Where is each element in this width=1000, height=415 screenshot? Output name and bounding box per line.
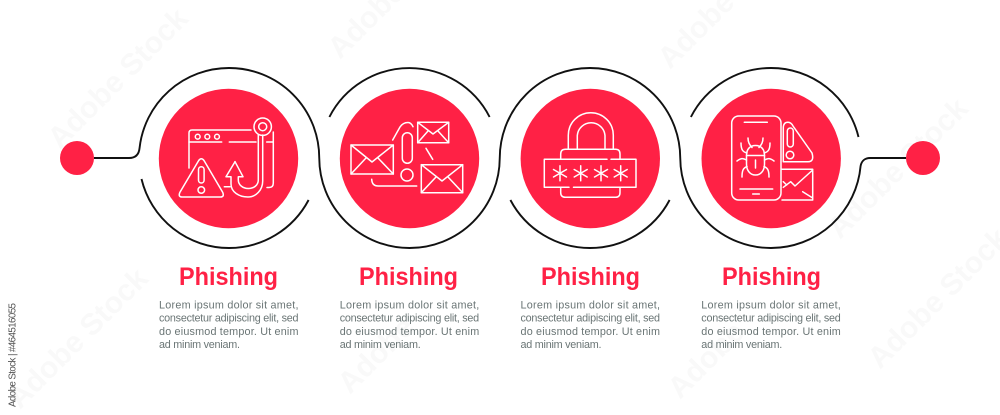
step 2 heading: Phishing: [359, 263, 458, 291]
connector line: [94, 68, 906, 248]
step 2 body text: Lorem ipsum dolor sit amet,: [340, 300, 479, 312]
step 4 body text: Lorem ipsum dolor sit amet,: [701, 300, 841, 312]
step 4 body text: do eiusmod tempor. Ut enim: [701, 326, 841, 338]
step 4 body text: consectetur adipiscing elit, sed: [701, 313, 841, 325]
icon: spam emails: [351, 122, 463, 193]
step 1 body text: Lorem ipsum dolor sit amet,: [159, 300, 298, 312]
watermark layer: Adobe: [662, 316, 751, 405]
step 1 body text: do eiusmod tempor. Ut enim: [159, 326, 298, 338]
watermark layer: Adobe Stock: [42, 2, 195, 155]
step 2 body text: consectetur adipiscing elit, sed: [340, 313, 479, 325]
circle step 2: [340, 89, 479, 228]
watermark layer: Adobe: [332, 311, 421, 400]
end dot: [906, 141, 940, 175]
step 3 body text: Lorem ipsum dolor sit amet,: [520, 300, 660, 312]
step 1 body text: consectetur adipiscing elit, sed: [159, 313, 298, 325]
icon: phone with bug and alert: [732, 116, 813, 200]
step 1 body text: ad minim veniam.: [159, 339, 240, 351]
step 2 body text: ad minim veniam.: [340, 339, 421, 351]
step 3 body text: ad minim veniam.: [520, 339, 602, 351]
step 1 body text: [159, 300, 298, 351]
step 1 heading: Phishing: [179, 263, 278, 291]
arc: upper ring step 2: [329, 68, 490, 117]
arc: lower ring step 1: [142, 179, 309, 248]
step 3 body text: [520, 300, 660, 351]
step 3 heading: Phishing: [541, 263, 640, 291]
step 4 body text: ad minim veniam.: [701, 339, 782, 351]
watermark layer: Adobe Stock: [822, 92, 975, 245]
circle step 3: [521, 89, 660, 228]
icon: phishing hook on browser: [179, 118, 273, 197]
step 2 body text: do eiusmod tempor. Ut enim: [340, 326, 479, 338]
step 4 body text: [701, 300, 841, 351]
arc: upper ring step 4: [691, 68, 858, 137]
step 2 body text: [340, 300, 479, 351]
step 3 body text: consectetur adipiscing elit, sed: [520, 313, 660, 325]
step 4 heading: Phishing: [722, 263, 821, 291]
start dot: [60, 141, 94, 175]
stock id label: Adobe Stock | #464516055: [8, 302, 18, 407]
circle step 4: [702, 89, 841, 228]
circle step 1: [159, 89, 298, 228]
icon: padlock with password: [544, 113, 636, 197]
arc: lower ring step 3: [510, 200, 670, 248]
watermark layer: Adobe Stock: [2, 262, 155, 415]
step 3 body text: do eiusmod tempor. Ut enim: [520, 326, 660, 338]
